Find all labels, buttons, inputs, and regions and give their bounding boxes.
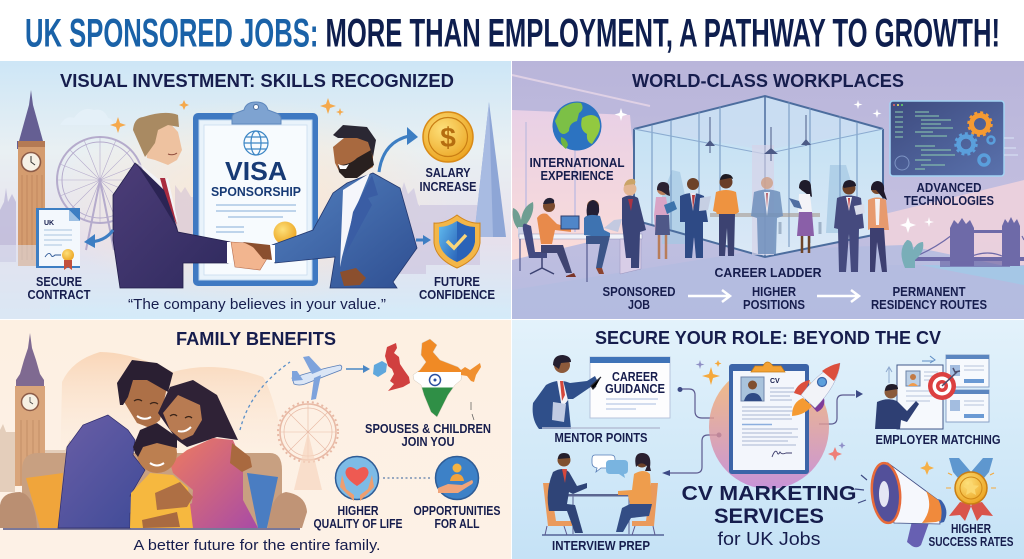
label: salary increase (420, 165, 477, 194)
icon: opportunities (436, 456, 478, 500)
quote: “The company believes in your value.” (128, 296, 386, 313)
person: child (130, 423, 193, 528)
jacket (272, 173, 417, 288)
laptop (561, 216, 579, 229)
hand (231, 242, 268, 270)
label: employer matching: EMPLOYER MATCHING (876, 432, 1000, 447)
interview scene (542, 453, 664, 535)
tie (160, 178, 177, 225)
person: glass room man (751, 177, 783, 254)
suit (113, 163, 230, 288)
label: international experience: INTERNATIONAL (530, 155, 625, 170)
cloud (60, 109, 113, 125)
arrow: to document (87, 230, 113, 242)
icon: big ben (0, 333, 74, 492)
career guidance text: CAREER (612, 369, 659, 384)
icon: big ben (0, 90, 50, 319)
label: interview prep: INTERVIEW PREP (552, 538, 650, 553)
arrow: to coin (379, 136, 409, 172)
panel: secure your role (512, 320, 1024, 559)
person: sponsor man (113, 113, 268, 288)
father hand (155, 482, 193, 510)
person: man navy suit (680, 178, 711, 258)
person: orange sweater man (713, 174, 739, 256)
icon: shield (434, 215, 480, 268)
connector: employer (819, 395, 855, 424)
icon: plane (292, 356, 342, 400)
arrow: positions to residency (817, 290, 859, 302)
heading: workplaces: WORLD-CLASS WORKPLACES (632, 70, 904, 91)
face (123, 373, 167, 428)
dashed flight path (240, 362, 290, 430)
icon: uk map (373, 343, 410, 391)
cv photo (741, 377, 764, 401)
clipboard: visa sponsorship (193, 102, 318, 286)
tech screen (890, 101, 1004, 176)
icon: coin (423, 112, 473, 162)
career guidance text: GUIDANCE (605, 381, 665, 396)
arrowhead: employer (856, 390, 863, 398)
plant right (901, 240, 923, 268)
office right peach (880, 180, 1024, 265)
label: mentor points: MENTOR POINTS (554, 430, 648, 445)
head (137, 433, 177, 473)
label: higher positions: HIGHER (752, 284, 797, 299)
clip (232, 102, 281, 124)
beard (338, 150, 374, 178)
career guidance text (605, 369, 665, 396)
person: woman with purple skirt (789, 180, 814, 253)
chairs (543, 483, 658, 526)
career guidance board (590, 357, 670, 418)
label: secure contract: CONTRACT (28, 287, 91, 302)
person: mentor (533, 355, 660, 429)
hair (158, 380, 238, 447)
tagline: A better future for the entire family. (134, 537, 380, 554)
label: quality of life: HIGHER (338, 503, 379, 518)
icon: london eye (57, 137, 143, 250)
glass room (634, 96, 883, 257)
sweater (170, 438, 258, 528)
office window left (512, 110, 640, 260)
label: quality of life (314, 503, 403, 531)
visa text: VISA (225, 156, 287, 186)
arrow: job to positions (688, 290, 730, 302)
icon: cv clipboard: CV (770, 378, 780, 385)
dotted link (383, 477, 431, 479)
label: spouses and children: JOIN YOU (402, 434, 454, 449)
dot: interview (716, 432, 722, 438)
london eye (278, 402, 338, 490)
label: higher positions (743, 284, 805, 312)
label: international experience: EXPERIENCE (540, 168, 614, 183)
person: blond manager (622, 179, 646, 268)
icon: quality of life (336, 456, 378, 501)
chair (523, 224, 547, 258)
hair (133, 423, 177, 457)
label: secure contract: SECURE (36, 274, 82, 289)
bubbles (592, 455, 615, 472)
label: cv marketing services (682, 483, 856, 549)
person: woman orange jacket (868, 181, 889, 272)
icon: contract document (36, 208, 80, 270)
panel: family benefits (0, 320, 511, 559)
label: spouses and children: SPOUSES & CHILDREN (365, 421, 491, 436)
seated man (543, 200, 555, 212)
arrow: to shield (416, 238, 427, 242)
man (558, 454, 570, 466)
woman (636, 454, 648, 468)
sponsorship text: SPONSORSHIP (211, 184, 301, 199)
hair (133, 113, 179, 157)
plant left (513, 202, 533, 234)
water (920, 265, 1024, 285)
hand (243, 242, 272, 260)
label: career ladder: CAREER LADDER (714, 265, 822, 280)
icon: target (928, 368, 960, 400)
heading: family benefits: FAMILY BENEFITS (176, 328, 336, 349)
connector: interview (669, 435, 720, 473)
sofa (0, 453, 307, 528)
label: advanced technologies: ADVANCED (916, 180, 982, 195)
skyline left (0, 188, 16, 262)
table (568, 494, 634, 496)
desk with seated workers (519, 198, 642, 282)
icon: contract document: UK (44, 220, 54, 227)
shard (474, 102, 506, 237)
panel: visual investment (0, 61, 511, 319)
icon: medal (946, 458, 996, 521)
label: cv marketing services: CV MARKETING (682, 483, 856, 505)
icon: globe (244, 131, 268, 155)
label: sponsored job: JOB (628, 297, 650, 312)
label: salary increase: INCREASE (420, 179, 477, 194)
icon: rocket (792, 363, 840, 416)
label: residency routes: PERMANENT (892, 284, 966, 299)
background sunset shapes (60, 352, 290, 475)
label: residency routes: RESIDENCY ROUTES (871, 297, 987, 312)
label: spouses and children (365, 421, 491, 449)
label: higher positions: POSITIONS (743, 297, 805, 312)
label: advanced technologies: TECHNOLOGIES (904, 193, 994, 208)
label: future confidence: FUTURE (434, 274, 480, 289)
icon: gears (956, 112, 994, 165)
icon: tower bridge (914, 217, 1024, 267)
label: future confidence: CONFIDENCE (419, 287, 495, 302)
arrow: plane to map (346, 368, 366, 370)
icon: megaphone (855, 462, 946, 547)
person: candidate man (243, 125, 417, 288)
label: advanced technologies (904, 180, 994, 208)
arrowhead: interview (662, 470, 670, 476)
face (145, 120, 182, 165)
icon: globe (552, 102, 602, 150)
employer matching graphic (875, 355, 989, 429)
label: future confidence (419, 274, 495, 302)
hair (117, 360, 173, 405)
label: cv marketing services: for UK Jobs (718, 529, 820, 549)
icon: coin: $ (440, 122, 456, 153)
label: cv marketing services: SERVICES (714, 504, 824, 528)
label: higher success rates: HIGHER (951, 521, 991, 536)
hair (333, 125, 376, 157)
label: international experience (530, 155, 625, 183)
label: opportunities: FOR ALL (434, 516, 480, 531)
ground line (3, 528, 300, 530)
orb behind clipboard (709, 365, 829, 489)
face (163, 395, 202, 440)
dot: guidance (678, 387, 682, 392)
skyline behind doc (175, 185, 194, 257)
person: father (58, 360, 173, 528)
face (333, 133, 373, 178)
label: residency routes (871, 284, 987, 312)
label: sponsored job: SPONSORED (602, 284, 676, 299)
cuff (227, 242, 232, 263)
label: sponsored job (602, 284, 676, 312)
sparkles (614, 100, 934, 233)
label: opportunities (414, 503, 501, 531)
heading: secure your role: SECURE YOUR ROLE: BEYOND THE CV (595, 327, 942, 348)
person: woman with tablet (654, 182, 677, 259)
sweater (58, 415, 155, 528)
person: mother (158, 380, 258, 528)
shirt (130, 473, 193, 528)
label: salary increase: SALARY (426, 165, 471, 180)
icon: india map (413, 339, 481, 420)
icon: cv clipboard (729, 362, 809, 474)
sparkles (696, 360, 934, 475)
person: man with tablet (834, 180, 865, 272)
shirt (340, 173, 370, 267)
collar lapel (136, 163, 178, 230)
panel: world-class workplaces (512, 61, 1024, 319)
cuff (270, 245, 275, 262)
connector: guidance (681, 389, 714, 418)
label: quality of life: QUALITY OF LIFE (314, 516, 403, 531)
person: employer (875, 384, 919, 429)
mother hand (142, 512, 180, 528)
lower hand (340, 268, 366, 286)
heading: visual investment: VISUAL INVESTMENT: SKILLS RECOGNIZED (60, 70, 454, 91)
skyline right (394, 182, 480, 274)
sparkles (110, 98, 344, 133)
label: secure contract (28, 274, 91, 302)
hand (230, 443, 252, 472)
label: higher success rates (928, 521, 1014, 549)
label: opportunities: OPPORTUNITIES (414, 503, 501, 518)
lapel (345, 175, 378, 255)
seated woman (587, 200, 599, 212)
